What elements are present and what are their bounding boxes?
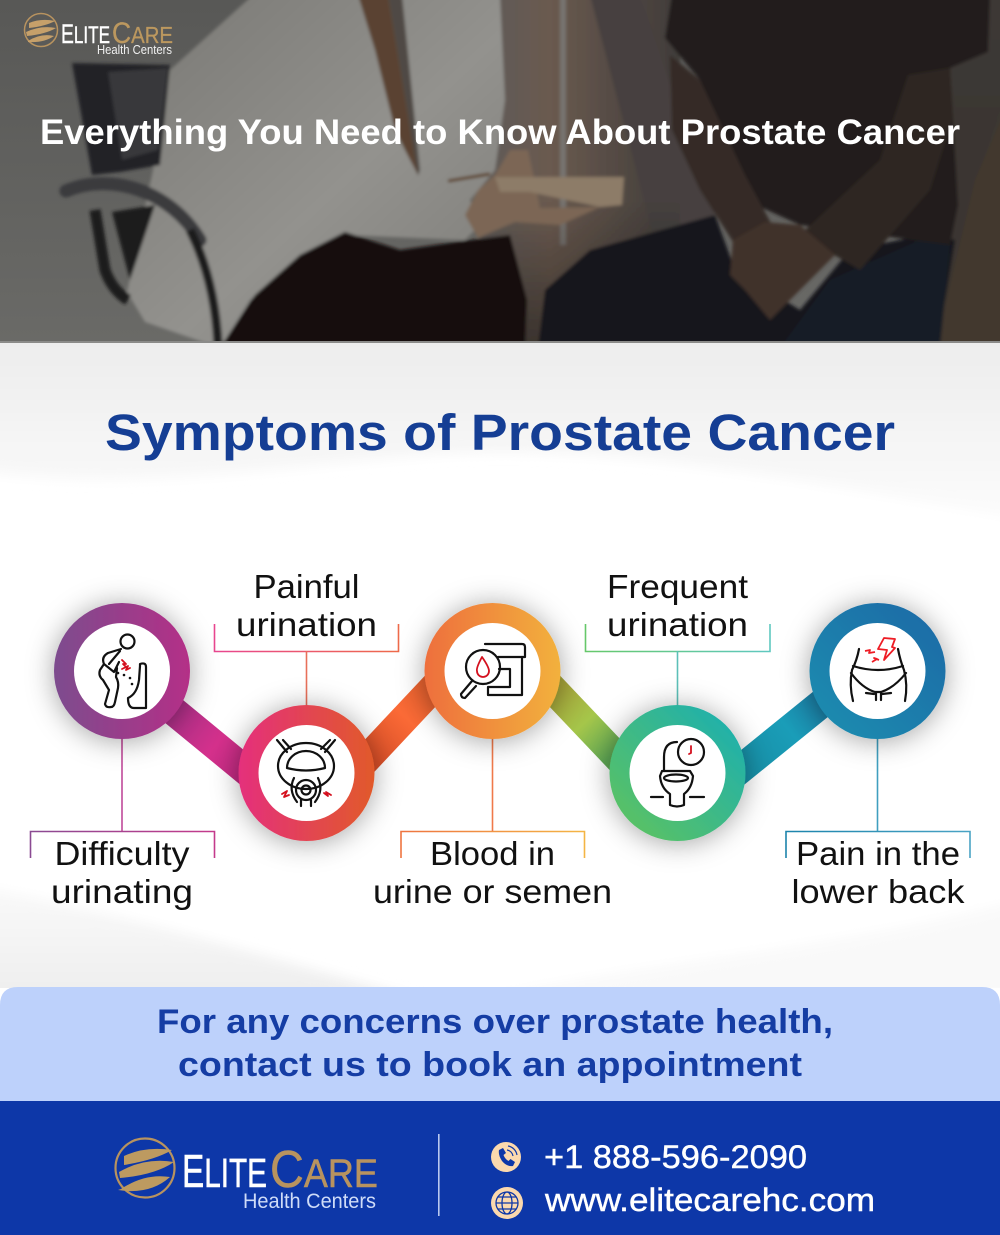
website: www.elitecarehc.com	[544, 1182, 875, 1218]
icon: specimen jar and magnifier	[461, 644, 525, 698]
symptom node: difficulty urinating	[54, 603, 190, 739]
photo: patient shirt	[665, 0, 990, 245]
top logo: Health Centers	[97, 43, 172, 57]
label: difficulty urinating: Difficulty	[54, 835, 190, 872]
footer logo	[116, 1138, 378, 1213]
label: frequent urination	[607, 568, 748, 643]
photo: chair	[66, 63, 218, 345]
label: difficulty urinating: urinating	[51, 873, 193, 910]
label: blood in urine or semen	[373, 835, 612, 910]
top logo: ELITE	[61, 19, 110, 49]
icon: lower back pain	[851, 638, 906, 701]
top logo	[24, 14, 173, 57]
label: blood in urine or semen: urine or semen	[373, 873, 612, 910]
photo: patient hands	[730, 222, 835, 320]
label: pain in the lower back: Pain in the	[796, 835, 960, 872]
title: Everything You Need to Know About Prostate Cancer	[40, 113, 960, 152]
symptom node: frequent urination	[610, 705, 746, 841]
symptom node: pain in lower back	[810, 603, 946, 739]
photo: patient arms	[670, 55, 772, 245]
icon: man urinating	[99, 634, 146, 708]
label: difficulty urinating	[51, 835, 193, 910]
symptom node: blood in urine	[424, 603, 560, 739]
photo: background wall	[480, 0, 1000, 348]
label: painful urination: urination	[236, 606, 377, 643]
top logo: CARE	[112, 17, 173, 50]
symptom node: painful urination	[238, 705, 374, 841]
footer logo: ELITE	[182, 1145, 267, 1197]
photo: doctor trousers	[220, 232, 527, 348]
label: painful urination: Painful	[254, 568, 360, 605]
label: pain in the lower back: lower back	[792, 873, 965, 910]
call to action band	[0, 987, 1000, 1101]
label: painful urination	[236, 568, 377, 643]
icon: globe	[491, 1187, 523, 1219]
label: frequent urination: urination	[607, 606, 748, 643]
label lines	[30, 624, 970, 858]
icon: bladder	[277, 740, 335, 806]
photo: patient jeans	[538, 215, 955, 348]
call to action band: contact us to book an appointment	[178, 1046, 802, 1084]
footer logo: Health Centers	[243, 1190, 376, 1213]
footer	[0, 1101, 1000, 1235]
photo: doctor hand and tablet	[448, 150, 624, 238]
label: pain in the lower back	[792, 835, 965, 910]
heading: Symptoms of Prostate Cancer	[105, 404, 895, 461]
hero photo: doctor and patient	[0, 0, 1000, 348]
icon: phone	[491, 1142, 521, 1172]
footer logo: CARE	[270, 1141, 378, 1199]
call to action band: For any concerns over prostate health,	[157, 1003, 833, 1041]
label: frequent urination: Frequent	[607, 568, 748, 605]
panel: symptoms background	[0, 320, 1000, 1000]
label: blood in urine or semen: Blood in	[430, 835, 555, 872]
icon: toilet and clock	[651, 739, 704, 806]
photo: doctor coat	[127, 0, 505, 348]
connector bands	[165, 684, 832, 778]
phone number: +1 888-596-2090	[544, 1139, 807, 1175]
photo: shirt under coat	[358, 0, 418, 175]
